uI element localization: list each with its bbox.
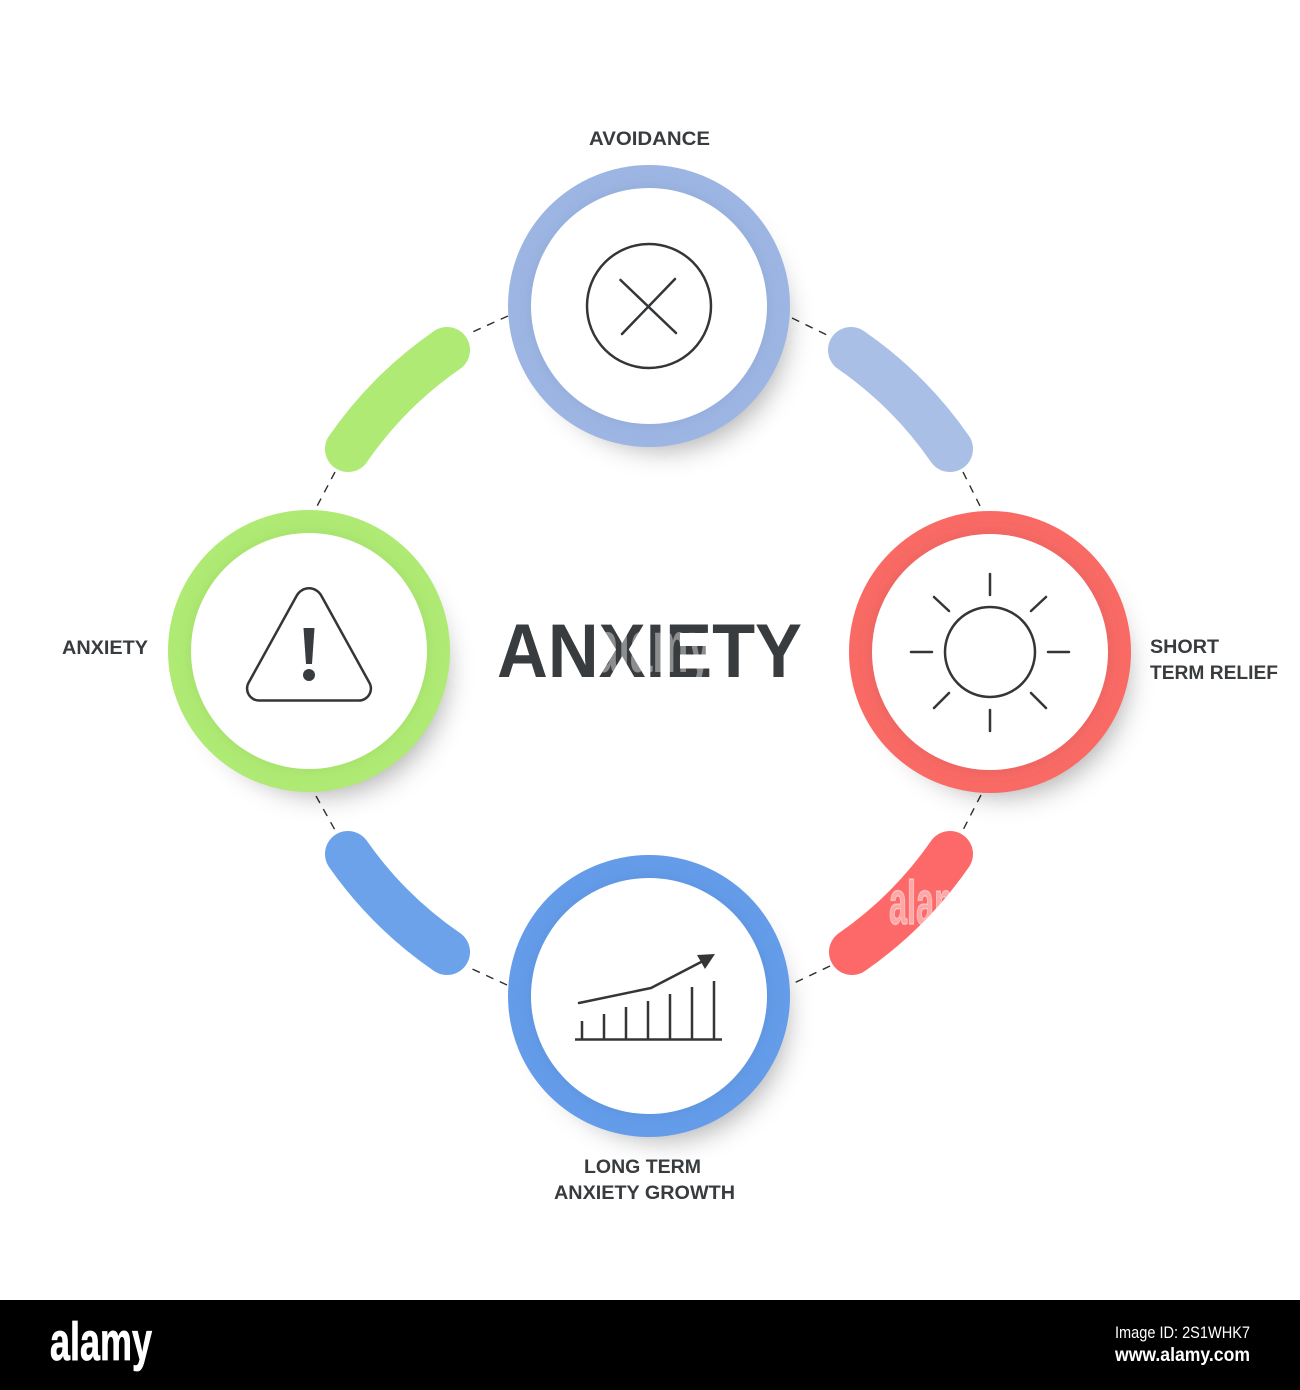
icon: sun	[911, 574, 1069, 731]
arc: periwinkle, top right	[851, 350, 950, 449]
icon: growth chart	[575, 954, 722, 1040]
arc: green, top left	[348, 350, 447, 449]
arc: red, bottom right	[852, 854, 950, 952]
arc: blue, bottom left	[348, 854, 447, 952]
label: short term relief: TERM RELIEF	[1150, 663, 1278, 684]
node: anxiety	[168, 510, 450, 795]
node: short term relief	[849, 511, 1131, 796]
title: alamy	[596, 605, 711, 688]
icon: x in circle	[587, 244, 711, 368]
label: long term anxiety growth	[554, 1157, 735, 1204]
image id: Image ID: 2S1WHK7	[1115, 1323, 1250, 1342]
title: ANXIETY	[497, 609, 802, 694]
watermark fragment on red arc: alamy	[889, 869, 981, 938]
node: long term anxiety growth	[508, 855, 790, 1140]
label: long term anxiety growth: LONG TERM	[584, 1157, 701, 1178]
icon: warning triangle	[247, 588, 371, 701]
dashed connectors	[315, 316, 981, 985]
label: anxiety: ANXIETY	[62, 638, 148, 659]
node: avoidance	[508, 165, 790, 450]
label: short term relief	[1150, 637, 1278, 684]
label: short term relief: SHORT	[1150, 637, 1219, 658]
label: avoidance: AVOIDANCE	[589, 129, 710, 150]
site url: www.alamy.com	[1114, 1345, 1250, 1366]
label: long term anxiety growth: ANXIETY GROWTH	[554, 1183, 735, 1204]
footer bar	[0, 1300, 1300, 1390]
footer logo: alamy	[50, 1312, 152, 1372]
